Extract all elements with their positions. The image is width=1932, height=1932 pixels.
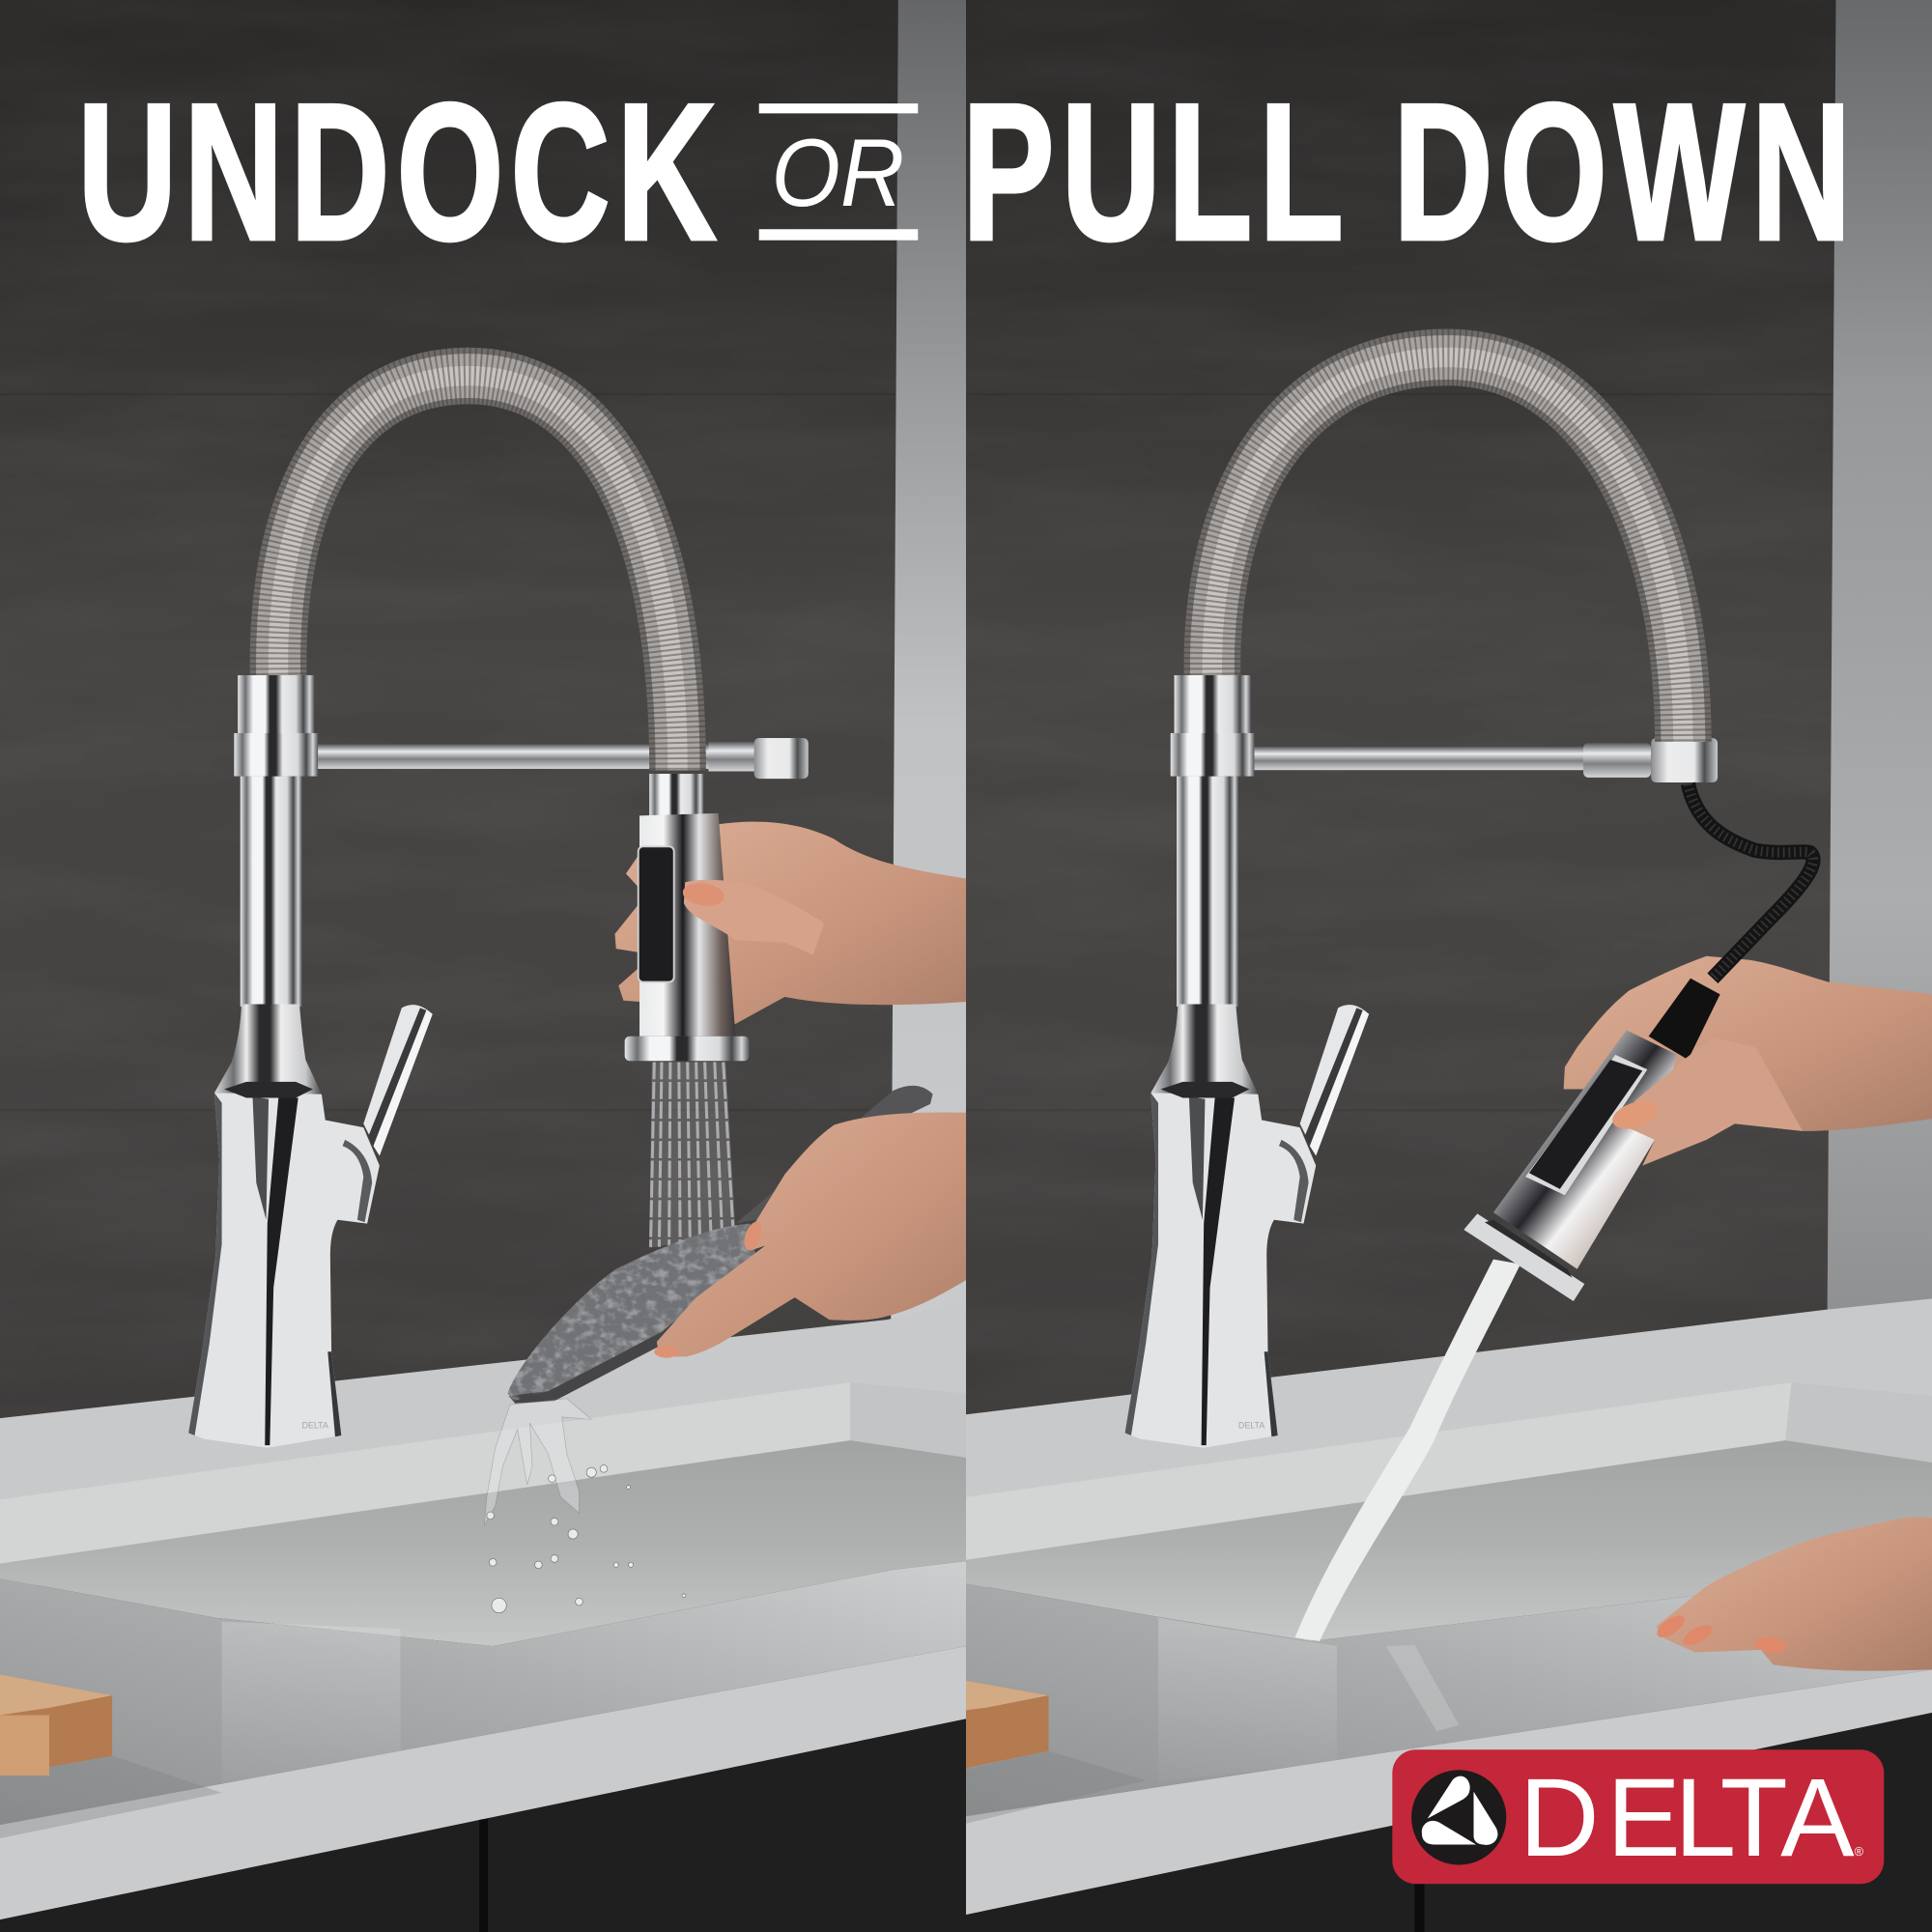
hose bbox=[1688, 783, 1813, 979]
panel: right photo, pull-down spray bbox=[966, 0, 1932, 1932]
faucet bbox=[188, 376, 809, 1448]
spray head bbox=[625, 774, 750, 1061]
water stream bbox=[1295, 1260, 1520, 1641]
counter and sink bbox=[0, 1301, 966, 1932]
heading: UNDOCK: UNDOCK bbox=[77, 63, 724, 280]
wall bbox=[966, 0, 1836, 1417]
cutting board bbox=[966, 1681, 1146, 1824]
panel: left photo, undocked spray bbox=[0, 0, 966, 1932]
hand holding spray: rear fingers and palm bbox=[614, 822, 966, 1024]
logo: Delta badge: ® bbox=[1855, 1844, 1864, 1859]
lever handle bbox=[363, 1005, 433, 1155]
lever handle and base: DELTA bbox=[1238, 1420, 1264, 1430]
pale wall strip bbox=[891, 0, 966, 1324]
water droplets bbox=[484, 1399, 686, 1613]
collars and column bbox=[1177, 777, 1238, 1007]
cutting board bbox=[0, 1674, 222, 1838]
resting hand bbox=[1654, 1517, 1932, 1671]
counter and sink bbox=[966, 1298, 1932, 1932]
coiled spring spout bbox=[1212, 357, 1683, 742]
pale wall strip bbox=[1828, 0, 1932, 1319]
icon: Delta triangle mark bbox=[1411, 1770, 1506, 1864]
wordmark: DELTA bbox=[1520, 1756, 1855, 1880]
base bbox=[188, 1005, 380, 1448]
coiled spring spout bbox=[278, 376, 678, 770]
swing arm bbox=[308, 738, 809, 779]
thumb bbox=[681, 880, 824, 955]
swing arm bbox=[1244, 738, 1718, 782]
wall bbox=[0, 0, 898, 1430]
pulled-out spray head bbox=[1463, 979, 1720, 1301]
collars and column bbox=[241, 777, 301, 1007]
faucet bbox=[1125, 357, 1718, 1448]
logo: Delta badge bbox=[1392, 1749, 1884, 1884]
base: DELTA bbox=[301, 1420, 328, 1430]
lever handle and base bbox=[1125, 1005, 1369, 1448]
water spray bbox=[649, 1062, 735, 1251]
hand holding plate bbox=[654, 1112, 966, 1358]
OR with rules: OR bbox=[771, 120, 904, 227]
hand holding spray: palm and rear fingers bbox=[1564, 956, 1932, 1131]
title: undock or pull down bbox=[77, 63, 1858, 280]
plate being rinsed bbox=[508, 1086, 933, 1404]
front fingers of pull-down hand bbox=[1609, 1037, 1803, 1166]
